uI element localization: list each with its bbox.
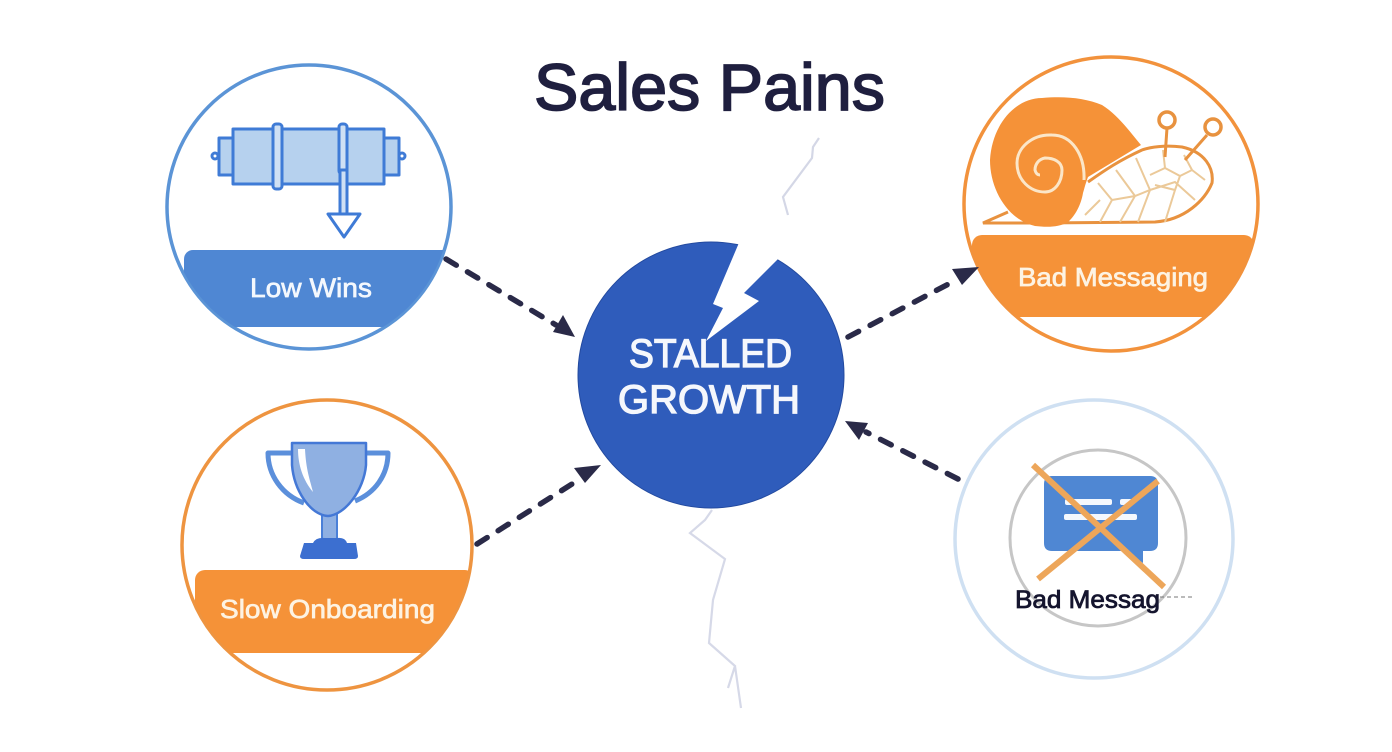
arrow: slow onboarding to center	[477, 465, 601, 544]
crack: lower	[690, 510, 741, 708]
icon: lightning bolt	[706, 235, 790, 341]
panel: bad messaging snail	[964, 57, 1258, 351]
label band: slow onboarding: Slow Onboarding	[220, 594, 435, 624]
panel: low wins	[167, 65, 456, 349]
icon: trophy	[268, 443, 388, 559]
icon: message bubble	[1044, 476, 1158, 563]
arrow: low wins to center	[446, 259, 575, 337]
title: Sales Pains	[534, 50, 885, 124]
label band: low wins: Low Wins	[250, 273, 372, 303]
label band: low wins	[184, 250, 456, 327]
label band: bad messaging	[972, 235, 1254, 317]
label band: slow onboarding	[195, 570, 475, 653]
label band: bad messaging: Bad Messaging	[1018, 262, 1208, 292]
label: stalled growth: GROWTH	[618, 378, 800, 422]
crack: upper	[783, 138, 819, 215]
panel: slow onboarding	[182, 400, 475, 690]
arrow: center to bad messaging	[848, 267, 979, 337]
center circle: stalled growth	[578, 235, 844, 508]
icon: cross	[1033, 465, 1164, 587]
label: stalled growth	[618, 332, 800, 422]
icon: pipe with down arrow	[212, 124, 405, 237]
panel: bad message crossed out	[955, 400, 1233, 678]
label: bad message: Bad Messag	[1015, 586, 1160, 614]
infographic: sales pains	[165, 55, 1260, 708]
icon: snail	[983, 97, 1221, 227]
label: stalled growth: STALLED	[629, 332, 792, 376]
arrow: bad message to center	[845, 421, 958, 479]
